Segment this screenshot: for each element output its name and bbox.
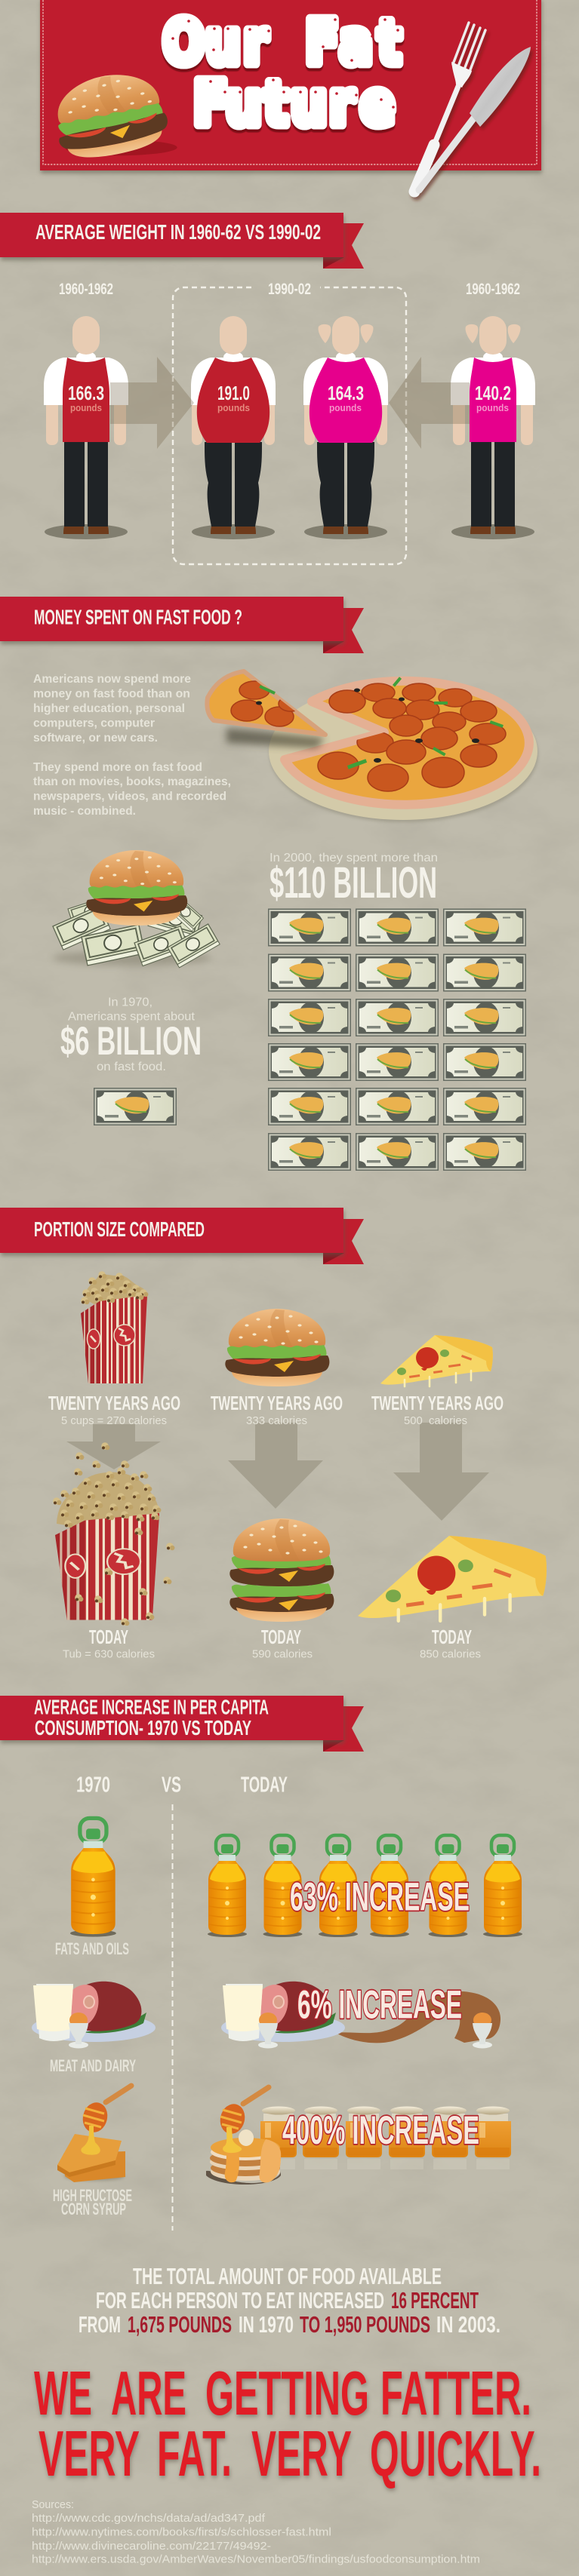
icon: meat and dairy <box>32 1982 156 2049</box>
headline: very fat very quickly: VERY <box>38 2418 140 2490</box>
callout: 1970 spending: $6 BILLION <box>60 1019 202 1064</box>
headline: very fat very quickly <box>38 2418 541 2490</box>
label group: twenty years ago <box>48 1392 504 1427</box>
weight values: 191.0 <box>217 382 250 404</box>
headline: we are getting fatter: GETTING <box>205 2358 369 2428</box>
label: high fructose corn syrup: HIGH FRUCTOSE <box>53 2186 132 2205</box>
weight values: pounds <box>476 402 509 413</box>
text block: fast food spending: software, or new cars. <box>33 732 158 745</box>
text block: total food available: IN 1970 <box>239 2311 294 2338</box>
text block: fast food spending: music - combined. <box>33 805 136 818</box>
callout: 2000 spending <box>269 852 438 907</box>
section ribbon: money spent: MONEY SPENT ON FAST FOOD ? <box>34 605 242 629</box>
figure: woman 1960-62 <box>451 316 535 539</box>
callout: 2000 spending: $110 BILLION <box>269 858 437 907</box>
label: fats and oils: FATS AND OILS <box>55 1939 129 1958</box>
weight values: pounds <box>217 402 250 413</box>
icons: honey jars <box>260 2106 511 2169</box>
callout: 1970 spending: on fast food. <box>97 1061 166 1073</box>
title text <box>163 8 402 139</box>
label group: twenty years ago: 500 calories <box>404 1414 467 1427</box>
text block: total food available <box>79 2263 500 2338</box>
title banner <box>40 0 541 192</box>
icon: honey dipper on toast <box>57 2086 131 2182</box>
icon: big popcorn tub <box>53 1442 174 1626</box>
popcorn kernels big <box>53 1442 174 1626</box>
section ribbon: portion size: PORTION SIZE COMPARED <box>34 1217 205 1241</box>
popcorn kernels small <box>81 1271 148 1304</box>
sources <box>32 2499 480 2566</box>
label group: today: 850 calories <box>420 1647 481 1661</box>
section ribbon: average increase: AVERAGE INCREASE IN PER CAPITA <box>34 1696 269 1718</box>
icon: more meat and dairy <box>221 1982 500 2049</box>
sources: http://www.ers.usda.gov/AmberWaves/November05/findings/usfoodconsumption.htm <box>32 2554 480 2566</box>
text block: total food available: FROM <box>79 2311 121 2338</box>
label group: twenty years ago: 5 cups = 270 calories <box>61 1414 167 1427</box>
icon: big oil bottle <box>70 1818 116 1937</box>
icon: single bill <box>94 1088 176 1125</box>
label group: today <box>63 1626 481 1661</box>
text block: fast food spending: computers, computer <box>33 717 155 730</box>
arrow: popcorn <box>66 1424 161 1469</box>
icon: double burger <box>229 1518 334 1622</box>
column headings: TODAY <box>241 1773 288 1797</box>
weight values: pounds <box>70 402 102 413</box>
figure: woman 1990-02 <box>303 316 388 539</box>
column headings: VS <box>162 1773 181 1797</box>
title text: Our Fat <box>163 8 402 78</box>
callout: 63% increase: 63% INCREASE <box>290 1875 470 1919</box>
label: high fructose corn syrup <box>53 2186 132 2218</box>
weight values <box>68 382 511 413</box>
label group: today: 590 calories <box>252 1647 313 1661</box>
label group: today: Tub = 630 calories <box>63 1647 155 1661</box>
icons: six oil bottles <box>208 1835 522 1937</box>
icon: burger on cash <box>53 850 220 968</box>
year label 1990-02: 1990-02 <box>268 281 311 298</box>
text block: fast food spending: higher education, personal <box>33 702 185 715</box>
figure: man 1990-02 <box>191 316 276 539</box>
icon: small burger <box>225 1309 329 1386</box>
icon: pancakes and honey <box>206 2087 281 2185</box>
label group: twenty years ago: TWENTY YEARS AGO <box>371 1392 504 1414</box>
callout: 6% increase: 6% INCREASE <box>297 1982 462 2028</box>
text block: fast food spending: money on fast food than on <box>33 688 190 700</box>
label: meat and dairy: MEAT AND DAIRY <box>50 2056 136 2075</box>
label group: today: TODAY <box>261 1626 301 1648</box>
label group: today: TODAY <box>89 1626 128 1648</box>
label group: twenty years ago: TWENTY YEARS AGO <box>48 1392 180 1414</box>
text block: total food available: TO 1,950 POUNDS <box>300 2311 430 2338</box>
headline: we are getting fatter: ARE <box>111 2358 186 2428</box>
sources: http://www.nytimes.com/books/first/s/schlosser-fast.html <box>32 2527 331 2539</box>
arrow: men increase <box>110 357 194 449</box>
headline: very fat very quickly: FAT. <box>157 2418 232 2490</box>
text block: fast food spending <box>33 673 231 818</box>
sources: Sources: <box>32 2499 74 2511</box>
arrow: women increase <box>389 357 470 449</box>
text block: fast food spending: than on movies, books, magazines, <box>33 775 231 788</box>
year label 1960-1962 left: 1960-1962 <box>59 281 113 298</box>
cash bundles <box>53 895 220 968</box>
weight values: 166.3 <box>68 382 104 404</box>
section ribbon: average weight <box>0 213 364 269</box>
headline: very fat very quickly: VERY <box>251 2418 352 2490</box>
icon: pizza slice <box>207 671 325 748</box>
section ribbon: money spent <box>0 597 364 653</box>
headline: we are getting fatter <box>34 2358 541 2490</box>
dashed box: 1990-02 group <box>173 287 406 564</box>
icon: small popcorn <box>81 1271 148 1383</box>
label: high fructose corn syrup: CORN SYRUP <box>61 2200 126 2218</box>
bill grid <box>269 909 525 1170</box>
text block: total food available: 1,675 POUNDS <box>128 2311 232 2338</box>
text block: fast food spending: They spend more on fast food <box>33 761 202 774</box>
text block: total food available: FOR EACH PERSON TO EAT INCREASED <box>96 2287 384 2313</box>
title letter dots <box>171 18 399 109</box>
title text: Future <box>193 69 395 139</box>
icon: small pizza slice <box>380 1335 493 1386</box>
headline: we are getting fatter: WE <box>34 2358 92 2428</box>
weight values: 140.2 <box>475 382 511 404</box>
sources: http://www.cdc.gov/nchs/data/ad/ad347.pdf <box>32 2513 266 2525</box>
text block: total food available: 16 PERCENT <box>391 2287 479 2313</box>
figure: man 1960-62 <box>44 316 128 539</box>
section ribbon: portion size <box>0 1208 364 1264</box>
label group: twenty years ago: 333 calories <box>246 1414 307 1427</box>
text block: fast food spending: newspapers, videos, and recorded <box>33 791 226 803</box>
callout: 2000 spending: In 2000, they spent more than <box>269 852 438 864</box>
column headings <box>76 1773 288 1797</box>
text block: total food available: IN 2003. <box>436 2311 500 2338</box>
icon: big pizza slice <box>358 1536 547 1621</box>
weight values: pounds <box>329 402 362 413</box>
text block: fast food spending: Americans now spend more <box>33 673 191 686</box>
section ribbon: average increase: CONSUMPTION- 1970 VS TODAY <box>35 1716 251 1739</box>
weight values: 164.3 <box>328 382 364 404</box>
callout: 1970 spending: In 1970, <box>108 996 152 1009</box>
icon: fork and knife <box>414 23 531 192</box>
section ribbon: average weight: AVERAGE WEIGHT IN 1960-62 VS 1990-02 <box>35 220 321 244</box>
sources: http://www.divinecaroline.com/22177/49492- <box>32 2541 271 2553</box>
callout: 1970 spending: Americans spent about <box>68 1011 196 1023</box>
label group: today: TODAY <box>432 1626 472 1648</box>
section ribbon: average increase <box>0 1696 364 1752</box>
icon: header burger <box>48 65 180 177</box>
label group: twenty years ago: TWENTY YEARS AGO <box>211 1392 343 1414</box>
icon: pizza with slice removed <box>269 677 538 822</box>
column headings: 1970 <box>76 1773 110 1797</box>
year label 1960-1962 right: 1960-1962 <box>466 281 520 298</box>
arrow: burger <box>228 1423 323 1509</box>
callout: 1970 spending <box>60 996 202 1073</box>
arrow: pizza <box>393 1423 489 1521</box>
